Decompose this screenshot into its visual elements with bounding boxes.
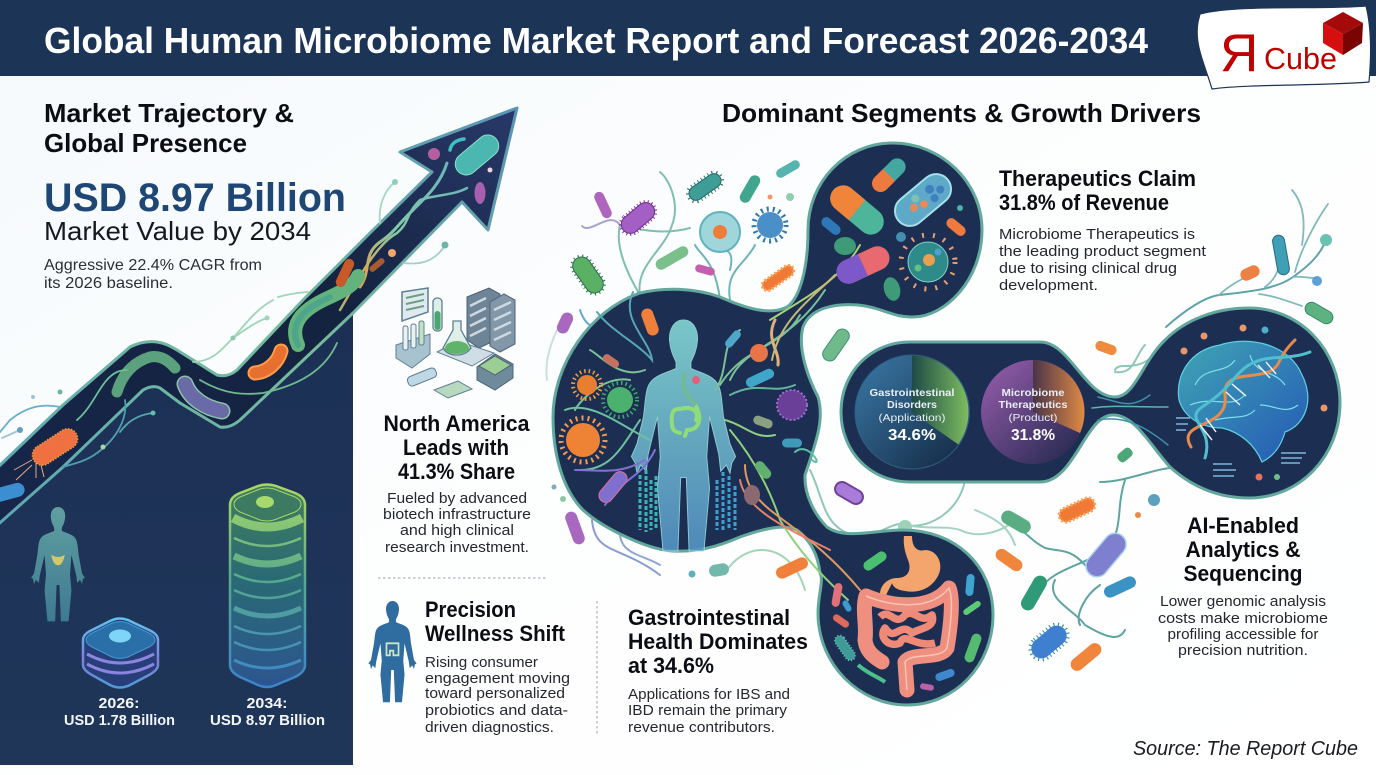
heading: market trajectory: Market Trajectory & <box>44 98 294 128</box>
label: 2034 value: 2034: <box>246 696 288 712</box>
panel: lozenge and AI brain circle <box>841 308 1340 498</box>
text block: therapeutics: development. <box>999 278 1098 294</box>
donut: gastrointestinal 34.6%: Gastrointestinal <box>870 387 955 399</box>
donut: gastrointestinal 34.6%: Disorders <box>887 399 937 411</box>
label: 2034 value: USD 8.97 Billion <box>210 713 325 729</box>
donut: microbiome therapeutics 31.8%: Therapeutics <box>998 399 1068 411</box>
text block: gastrointestinal health: revenue contributors. <box>628 720 775 736</box>
text block: therapeutics <box>999 166 1206 294</box>
text block: North America: Leads with <box>403 435 509 460</box>
donut: microbiome therapeutics 31.8%: 31.8% <box>1011 427 1055 444</box>
text block: therapeutics: due to rising clinical drug <box>999 261 1177 277</box>
logo: RCube <box>1197 6 1371 89</box>
text block: AI analytics: Sequencing <box>1184 561 1302 586</box>
text block: gastrointestinal health <box>628 605 808 736</box>
brain with DNA helix <box>1176 324 1328 480</box>
text block: therapeutics: Microbiome Therapeutics is <box>999 227 1195 243</box>
text block: North America: Fueled by advanced <box>387 491 527 507</box>
donut: gastrointestinal 34.6% <box>855 355 970 469</box>
label: 2026 value <box>64 696 175 729</box>
arrow: rising market growth arrow <box>0 108 517 528</box>
key figure: market value: USD 8.97 Billion <box>44 176 346 220</box>
arrow microbes <box>0 131 503 505</box>
text block: precision wellness: toward personalized <box>425 686 565 702</box>
text block: gastrointestinal health: Gastrointestinal <box>628 605 790 630</box>
decorative microbes and branches outside blobs <box>546 159 1335 674</box>
logo: RCube: Cube <box>1264 41 1337 76</box>
heading: dominant segments: Dominant Segments & Growth Drivers <box>722 98 1201 128</box>
text block: AI analytics: Analytics & <box>1186 537 1301 562</box>
text: CAGR note: Aggressive 22.4% CAGR from <box>44 257 262 274</box>
icon: biotech lab illustration <box>396 288 515 398</box>
text block: North America: research investment. <box>385 540 529 556</box>
text block: North America <box>383 411 531 556</box>
text block: AI analytics: AI-Enabled <box>1187 513 1299 538</box>
donut: gastrointestinal 34.6%: (Application) <box>878 412 946 424</box>
key figure: market value <box>44 176 346 246</box>
neck strands <box>1092 395 1168 445</box>
text block: gastrointestinal health: IBD remain the primary <box>628 703 788 719</box>
text block: gastrointestinal health: Health Dominates <box>628 629 808 654</box>
header bar <box>0 0 1376 76</box>
arrow strands <box>0 163 467 467</box>
chart: 2026 stack <box>83 618 158 688</box>
capsules and virus in therapeutics circle <box>819 155 968 303</box>
text block: North America: 41.3% Share <box>398 459 515 484</box>
text block: therapeutics: Therapeutics Claim <box>999 166 1196 191</box>
human body figure <box>631 320 736 551</box>
text block: North America: North America <box>384 411 530 436</box>
panel: left navy market trajectory panel <box>0 313 353 765</box>
label: 2026 value: USD 1.78 Billion <box>64 713 175 729</box>
donut: gastrointestinal 34.6%: 34.6% <box>888 427 936 444</box>
text: CAGR note <box>44 257 262 292</box>
intestine inside figure <box>672 406 699 436</box>
microbes inside main blob <box>561 307 807 532</box>
text block: precision wellness: Rising consumer <box>425 655 538 671</box>
branching microbiome network <box>565 245 860 600</box>
text block: AI analytics: costs make microbiome <box>1158 611 1328 627</box>
label: 2034 value <box>210 696 325 729</box>
text block: North America: and high clinical <box>400 523 514 539</box>
donut: microbiome therapeutics 31.8% <box>981 360 1085 464</box>
label: 2026 value: 2026: <box>98 696 140 712</box>
text block: AI analytics <box>1158 513 1328 659</box>
chart: 2034 stack <box>230 484 305 687</box>
text block: precision wellness <box>425 597 570 736</box>
panel: main human microbiome blob with therapeutics and gut circles <box>553 143 993 705</box>
text block: therapeutics: 31.8% of Revenue <box>999 190 1169 215</box>
text block: AI analytics: precision nutrition. <box>1178 643 1308 659</box>
source note: Source: The Report Cube <box>1133 738 1358 760</box>
text block: North America: biotech infrastructure <box>383 507 531 523</box>
donut: microbiome therapeutics 31.8%: Microbiome <box>1002 387 1065 399</box>
key figure: market value: Market Value by 2034 <box>44 216 311 246</box>
text block: precision wellness: driven diagnostics. <box>425 720 554 736</box>
title: Global Human Microbiome Market Report and Forecast 2026-2034 <box>44 20 1148 61</box>
text: CAGR note: its 2026 baseline. <box>44 275 173 292</box>
logo: RCube: Я <box>1220 24 1258 83</box>
text block: AI analytics: Lower genomic analysis <box>1160 594 1326 610</box>
text block: gastrointestinal health: Applications for IBS and <box>628 687 790 703</box>
donut: microbiome therapeutics 31.8%: (Product) <box>1008 412 1058 424</box>
icon: human silhouette on navy panel <box>31 507 85 621</box>
text block: therapeutics: the leading product segment <box>999 244 1206 260</box>
text block: AI analytics: profiling accessible for <box>1168 627 1319 643</box>
text block: precision wellness: Wellness Shift <box>425 621 566 646</box>
text block: precision wellness: engagement moving <box>425 671 570 687</box>
heading: market trajectory <box>44 98 294 158</box>
icon: blue human silhouette <box>368 601 417 702</box>
heading: market trajectory: Global Presence <box>44 128 247 158</box>
gut illustration <box>831 536 983 691</box>
text block: precision wellness: Precision <box>425 597 516 622</box>
text block: gastrointestinal health: at 34.6% <box>628 653 714 678</box>
text block: precision wellness: probiotics and data- <box>425 703 568 719</box>
